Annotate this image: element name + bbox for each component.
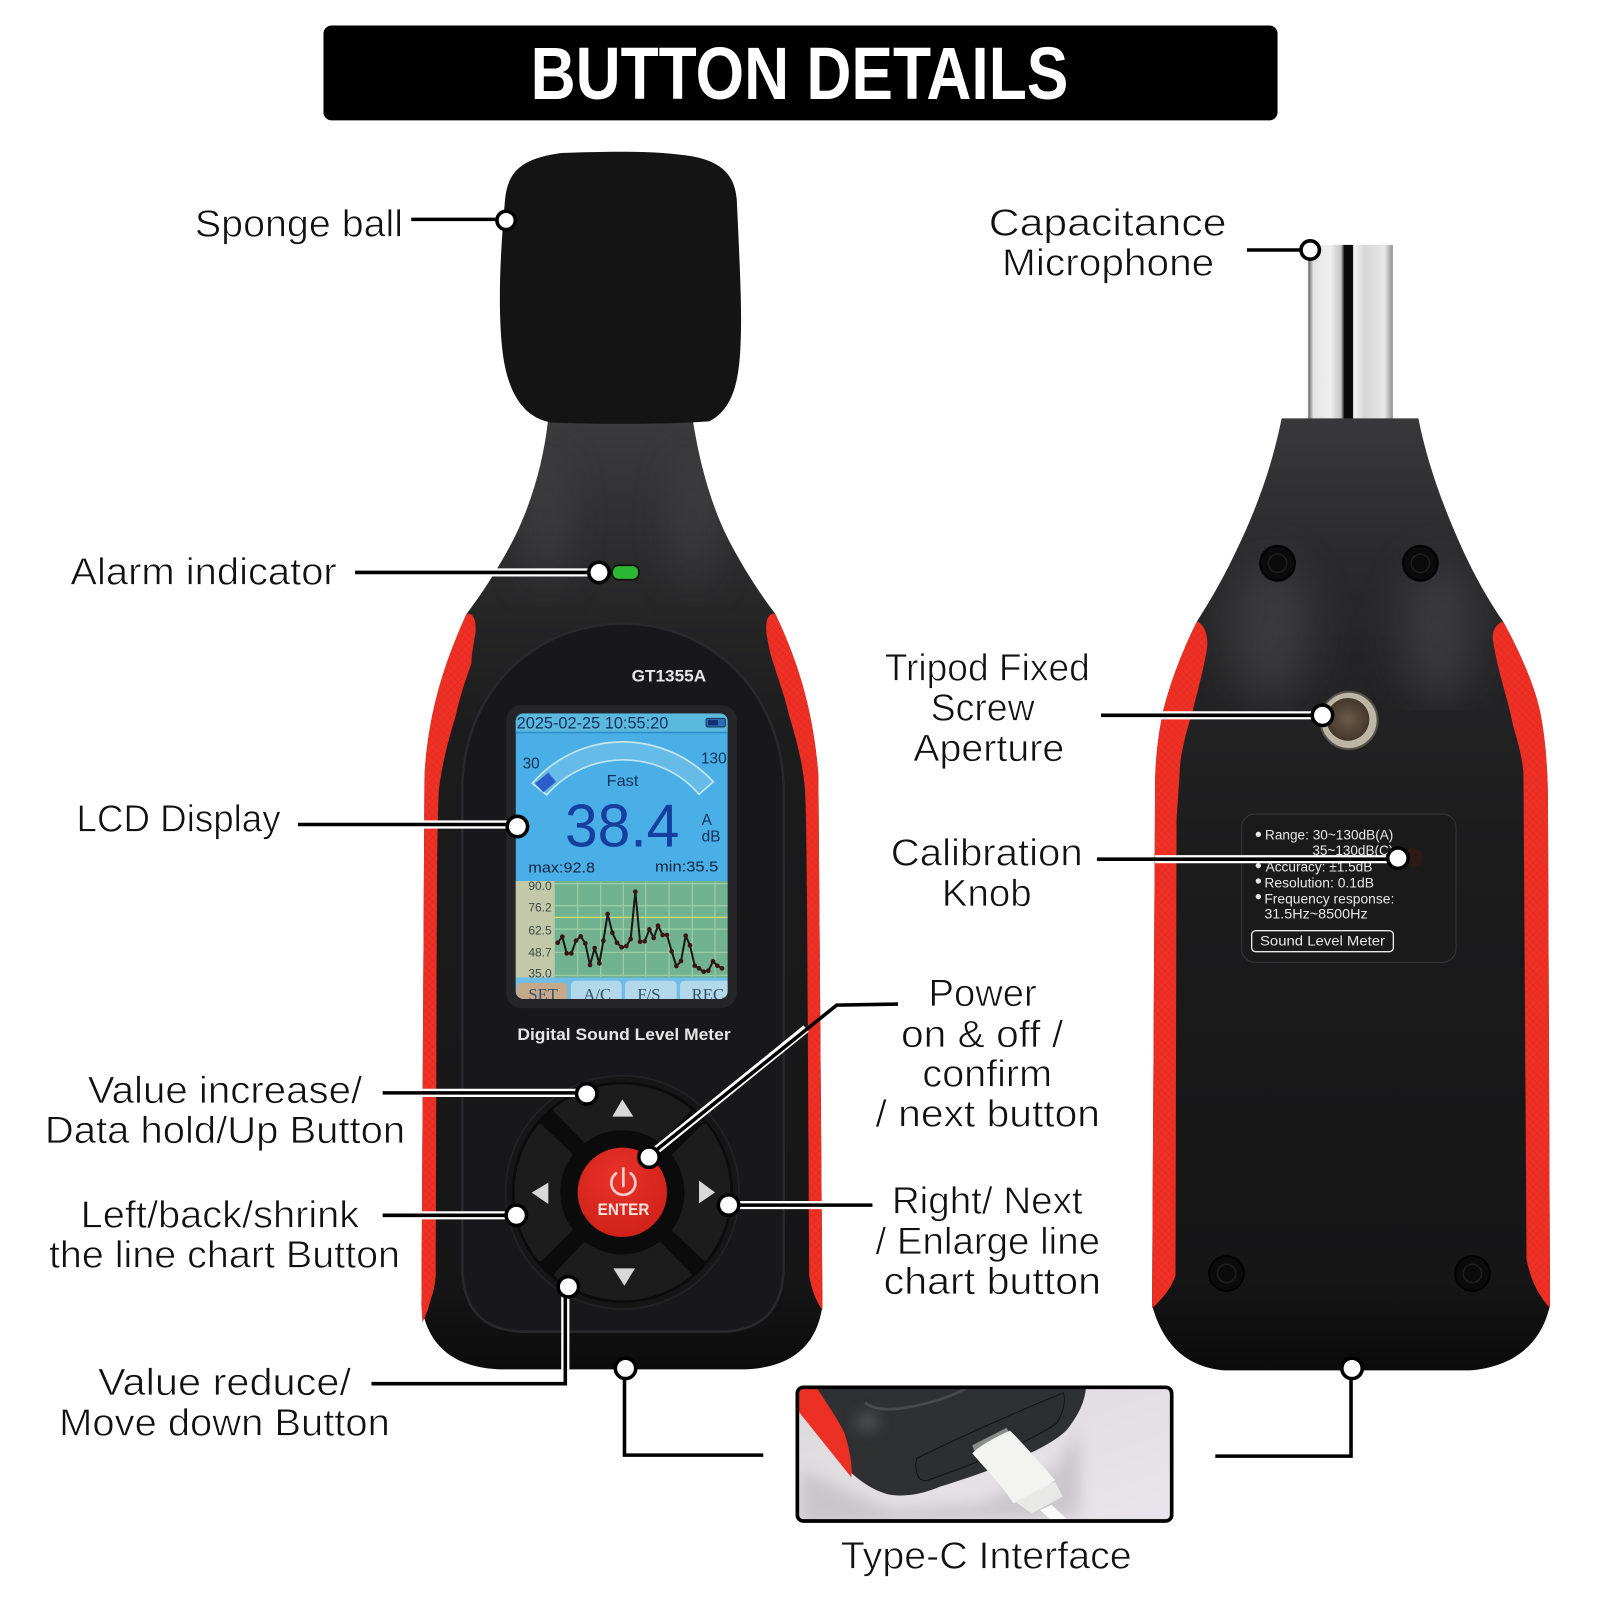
date time: 2025-02-25 10:55:20 (517, 714, 668, 733)
panel highlight (865, 1388, 967, 1409)
label: alarm indicator: Alarm indicator (70, 551, 337, 593)
model name: GT1355A (632, 667, 706, 686)
meter body (421, 420, 822, 1369)
front panel (462, 623, 784, 1332)
meter base (800, 1387, 1086, 1495)
label: calibration knob (891, 831, 1083, 914)
screen tabs: REC (692, 985, 724, 1004)
LCD display: 130 (701, 750, 727, 767)
neck highlights (532, 501, 710, 557)
body highlights (1230, 561, 1474, 704)
right red grip (766, 614, 822, 1310)
LCD display: Fast (607, 773, 639, 790)
Type-C photo inset (796, 1386, 1173, 1527)
label: power button: confirm (922, 1053, 1052, 1095)
soft shadow (800, 1439, 1084, 1519)
left red grip (1152, 621, 1207, 1308)
LCD display: A (702, 812, 713, 829)
screen tabs: SET (528, 985, 558, 1004)
callout: tripod aperture (1101, 705, 1333, 726)
callout: left button (383, 1205, 527, 1226)
screen tabs: A/C (583, 985, 611, 1004)
label: value increase: Value increase/ (88, 1069, 363, 1111)
port panel (916, 1393, 1064, 1481)
callout: type-C front (615, 1358, 763, 1455)
LCD display: 30 (523, 755, 540, 772)
label: calibration knob: Calibration (891, 831, 1083, 873)
callout: right button (718, 1195, 872, 1215)
label: type-C interface: Type-C Interface (841, 1534, 1132, 1576)
LCD display: min:35.5 (655, 859, 718, 875)
label: tripod screw aperture (885, 647, 1090, 769)
product name: Digital Sound Level Meter (517, 1026, 731, 1044)
line chart: 35.0 (528, 967, 552, 981)
callout: alarm indicator (355, 562, 609, 583)
right red grip (1493, 621, 1550, 1308)
line chart: 62.5 (528, 923, 552, 937)
label: tripod screw aperture: Tripod Fixed (885, 647, 1090, 689)
LCD display: dB (702, 829, 720, 846)
left button (517, 1126, 570, 1259)
title banner (323, 26, 1278, 120)
sponge ball (500, 152, 741, 424)
spec label: Accuracy: ±1.5dB (1266, 860, 1372, 875)
enter power button: ENTER (598, 1200, 649, 1219)
spec label: Sound Level Meter (1260, 934, 1385, 949)
spec label: Frequency response: (1264, 891, 1394, 906)
label: right button: Right/ Next (892, 1179, 1083, 1221)
label: right button (876, 1179, 1101, 1302)
label: tripod screw aperture: Aperture (913, 727, 1064, 769)
label: left button: the line chart Button (49, 1233, 400, 1275)
label: power button: Power (929, 972, 1037, 1014)
right button (675, 1126, 728, 1258)
callout: microphone (1247, 241, 1319, 259)
callout: LCD display (298, 816, 528, 837)
spec label: Range: 30~130dB(A) (1265, 827, 1393, 842)
label: value increase: Data hold/Up Button (45, 1109, 405, 1151)
front view of sound level meter (421, 152, 822, 1369)
spec label (1242, 814, 1456, 962)
title: BUTTON DETAILS (531, 32, 1068, 115)
reading: 38.4 (565, 792, 679, 860)
line chart: 90.0 (528, 879, 552, 893)
up button (556, 1087, 688, 1140)
rear view of sound level meter (1152, 245, 1550, 1370)
USB plug metal (972, 1427, 1009, 1452)
callout: power button (639, 1004, 898, 1167)
screws (1209, 546, 1490, 1291)
label: capacitance microphone: Microphone (1002, 242, 1214, 284)
left red grip (421, 614, 476, 1322)
label: left button (49, 1194, 400, 1275)
cable (972, 1431, 1055, 1503)
label: LCD display: LCD Display (77, 798, 281, 840)
label: value reduce: Value reduce/ (98, 1361, 352, 1403)
tripod screw aperture (1320, 692, 1378, 749)
alarm LED (612, 565, 639, 580)
screen bezel (506, 705, 737, 1008)
label: capacitance microphone (989, 202, 1227, 284)
control pad (506, 1076, 739, 1309)
label: value reduce: Move down Button (59, 1402, 390, 1444)
label: left button: Left/back/shrink (81, 1194, 359, 1236)
line chart: 76.2 (528, 901, 552, 915)
label: value increase (45, 1069, 405, 1151)
spec label: 31.5Hz~8500Hz (1264, 906, 1368, 921)
label: power button (876, 972, 1100, 1135)
callout: calibration knob (1097, 848, 1408, 868)
screen tabs (516, 978, 728, 999)
callout: down button (371, 1277, 579, 1384)
gauge arc (532, 742, 713, 795)
label: right button: / Enlarge line (876, 1220, 1100, 1262)
callout lines and dots (298, 211, 1408, 1456)
calibration knob (1404, 848, 1423, 867)
battery (706, 718, 725, 727)
enter power button (578, 1148, 667, 1237)
spec label: Resolution: 0.1dB (1264, 875, 1374, 890)
label: power button: on & off / (901, 1013, 1064, 1055)
callout: up button (383, 1084, 597, 1104)
capacitance microphone tube (1308, 245, 1393, 419)
LCD display (516, 713, 728, 1004)
LCD display: max:92.8 (528, 860, 595, 876)
label: right button: chart button (884, 1260, 1101, 1302)
rear body (1152, 418, 1550, 1370)
screen tabs: F/S (637, 985, 661, 1004)
label: power button: / next button (876, 1093, 1100, 1135)
line chart (516, 879, 728, 981)
gauge marker (535, 773, 556, 792)
label: tripod screw aperture: Screw (931, 686, 1035, 728)
label: capacitance microphone: Capacitance (989, 202, 1227, 244)
callout: type-C rear (1215, 1358, 1362, 1456)
label: sponge ball: Sponge ball (195, 203, 403, 245)
spec label: 35~130dB(C) (1312, 843, 1393, 858)
red grip (799, 1389, 852, 1477)
label: value reduce (59, 1361, 390, 1444)
down button (556, 1245, 689, 1298)
label: calibration knob: Knob (942, 872, 1032, 914)
line chart: 48.7 (528, 946, 552, 960)
callout: sponge ball (411, 211, 515, 230)
